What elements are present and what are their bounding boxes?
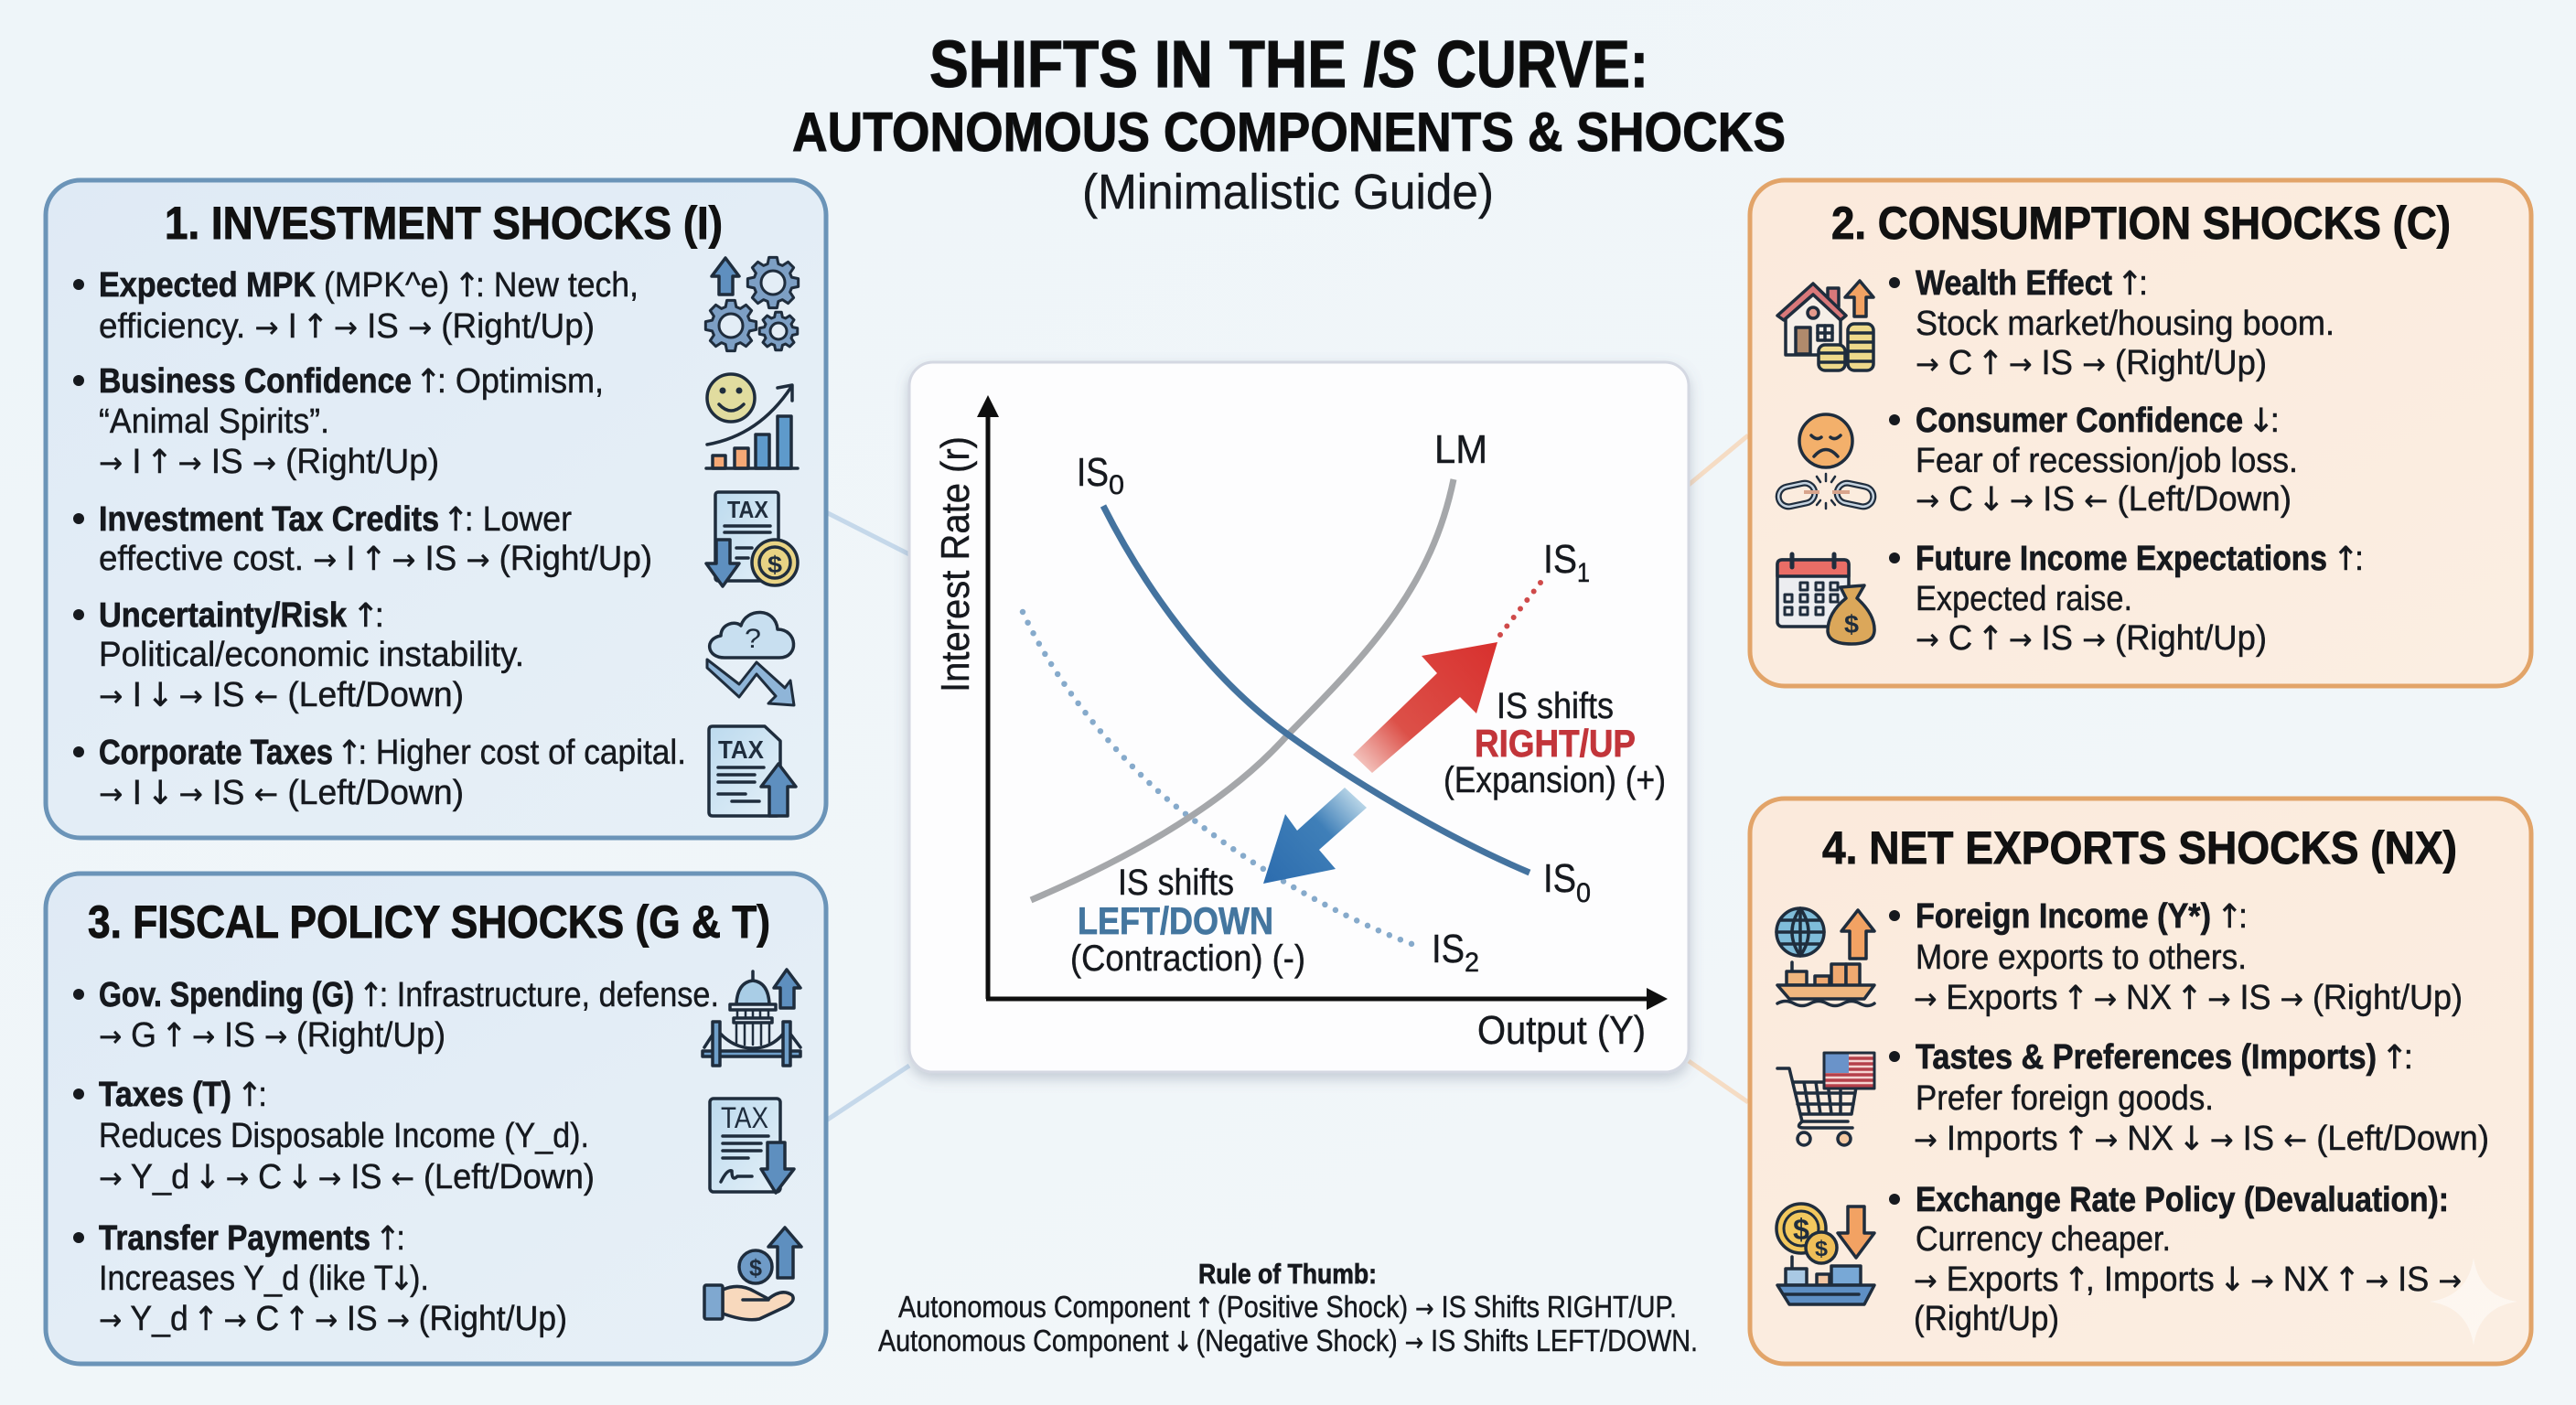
- item: business confidence: Business Confidence: [99, 362, 412, 401]
- item: consumer confidence: ↓:: [2248, 402, 2280, 440]
- arrow: red right/up shift: [1353, 642, 1497, 773]
- item: future income expectations: Expected raise.: [1916, 580, 2132, 618]
- item: expected MPK: efficiency. → I ↑ → IS → (Right/Up): [99, 307, 595, 346]
- rule of thumb: Autonomous Component ↓ (Negative Shock) → IS Shifts LEFT/DOWN.: [878, 1324, 1698, 1358]
- icon: corporate tax document: TAX: [718, 735, 764, 764]
- callout: expansion: RIGHT/UP: [1475, 722, 1636, 765]
- item: taxes: Taxes (T): [99, 1076, 231, 1114]
- item: foreign income: → Exports ↑ → NX ↑ → IS → (Right/Up): [1914, 979, 2463, 1017]
- icon: capitol and bridge: [703, 970, 800, 1066]
- item: transfer payments: Transfer Payments: [99, 1219, 370, 1258]
- icon: uncertainty cloud with falling arrow: [707, 612, 794, 705]
- callout: contraction: (Contraction) (-): [1070, 938, 1305, 979]
- item: expected MPK: [73, 266, 639, 346]
- icon: house with coins: [1777, 281, 1873, 370]
- icon: coins and blue ship: $: [1793, 1213, 1809, 1246]
- item: uncertainty: → I ↓ → IS ← (Left/Down): [99, 676, 464, 714]
- item: exchange rate policy: → Exports ↑, Imports ↓ → NX ↑ → IS →: [1914, 1260, 2462, 1299]
- callout: expansion: [1444, 686, 1666, 800]
- item: consumer confidence: Fear of recession/job loss.: [1916, 442, 2298, 480]
- item: foreign income: Foreign Income (Y*): [1916, 897, 2211, 936]
- item: investment tax credits: [73, 500, 652, 578]
- item: transfer payments: → Y_d ↑ → C ↑ → IS → (Right/Up): [99, 1300, 567, 1338]
- rule of thumb: [878, 1258, 1698, 1358]
- label: IS0 bottom: [1543, 856, 1591, 908]
- icon: tax document with down arrow: [710, 1099, 794, 1193]
- y axis: [977, 395, 999, 999]
- icon: calendar and money bag: $: [1844, 610, 1859, 638]
- item: tastes and preferences: Tastes & Preferences (Imports): [1916, 1038, 2377, 1077]
- item: consumer confidence: → C ↓ → IS ← (Left/Down): [1916, 480, 2292, 519]
- icon: uncertainty cloud with falling arrow: ?: [745, 624, 761, 654]
- item: expected MPK: Expected MPK: [99, 266, 316, 305]
- label: IS0 bottom: IS: [1543, 856, 1576, 901]
- icon: tax credit document: $: [767, 551, 783, 578]
- label: IS0 top: IS: [1077, 450, 1109, 495]
- item: wealth effect: Wealth Effect: [1916, 264, 2112, 303]
- item: tastes and preferences: → Imports ↑ → NX ↓ → IS ← (Left/Down): [1914, 1120, 2489, 1158]
- item: wealth effect: [1889, 264, 2334, 382]
- title: IS: [1363, 28, 1416, 102]
- item: expected MPK: (MPK^e) ↑: New tech,: [324, 266, 639, 305]
- item: exchange rate policy: (Right/Up): [1914, 1300, 2059, 1338]
- icon: tax credit document: [706, 492, 798, 586]
- callout: contraction: [1070, 863, 1305, 979]
- item: wealth effect: Stock market/housing boom.: [1916, 305, 2334, 343]
- label: IS0 top: 0: [1109, 470, 1124, 500]
- item: business confidence: ↑: Optimism,: [415, 362, 604, 401]
- item: uncertainty: Uncertainty/Risk: [99, 596, 348, 635]
- item: future income expectations: Future Income Expectations: [1916, 540, 2327, 578]
- rule of thumb: Autonomous Component ↑ (Positive Shock) → IS Shifts RIGHT/UP.: [898, 1290, 1677, 1325]
- icon: tax credit document: TAX: [727, 496, 769, 523]
- item: tastes and preferences: Prefer foreign goods.: [1916, 1079, 2214, 1118]
- label: IS1: IS: [1543, 537, 1577, 582]
- item: business confidence: “Animal Spirits”.: [99, 402, 329, 441]
- item: foreign income: More exports to others.: [1916, 938, 2247, 977]
- item: consumer confidence: [1889, 402, 2298, 519]
- item: future income expectations: ↑:: [2333, 540, 2364, 578]
- heading: net exports shocks: 4. NET EXPORTS SHOCKS (NX): [1822, 822, 2457, 874]
- item: consumer confidence: Consumer Confidence: [1916, 402, 2243, 440]
- item: gov spending: ↑: Infrastructure, defense.: [359, 976, 719, 1014]
- label: IS0 bottom: 0: [1576, 878, 1591, 908]
- item: corporate taxes: Corporate Taxes: [99, 734, 333, 772]
- item: uncertainty: ↑:: [352, 596, 384, 635]
- x axis: [986, 988, 1668, 1010]
- item: taxes: Reduces Disposable Income (Y_d).: [99, 1117, 589, 1155]
- panel: 2. consumption shocks: [1750, 180, 2531, 686]
- item: taxes: ↑:: [237, 1076, 267, 1114]
- item: transfer payments: [73, 1219, 567, 1338]
- icon: shopping cart with flag: [1777, 1053, 1874, 1145]
- heading: investment shocks: 1. INVESTMENT SHOCKS (I): [165, 198, 723, 249]
- icon: coins and blue ship: $: [1815, 1237, 1829, 1261]
- item: investment tax credits: effective cost. → I ↑ → IS → (Right/Up): [99, 540, 652, 578]
- title: AUTONOMOUS COMPONENTS & SHOCKS: [792, 102, 1786, 163]
- curve: IS0: [1103, 506, 1530, 873]
- callout: contraction: IS shifts: [1118, 863, 1234, 903]
- panel: 4. net exports shocks: [1750, 799, 2531, 1364]
- panel: IS-LM chart: [909, 362, 1689, 1072]
- icon: corporate tax document: [709, 726, 796, 816]
- icon: tax document with down arrow: TAX: [721, 1101, 768, 1134]
- title: (Minimalistic Guide): [1082, 165, 1494, 220]
- item: business confidence: [73, 362, 604, 481]
- label: IS2: IS: [1432, 927, 1465, 971]
- item: exchange rate policy: Currency cheaper.: [1916, 1220, 2171, 1259]
- panel: 3. fiscal policy shocks: [46, 874, 826, 1364]
- item: investment tax credits: Investment Tax Credits: [99, 500, 439, 539]
- icon: calendar and money bag: [1777, 554, 1874, 644]
- item: corporate taxes: [73, 734, 686, 812]
- title: [792, 28, 1786, 220]
- curve: IS1 dotted: [1500, 583, 1540, 635]
- item: investment tax credits: ↑: Lower: [443, 500, 572, 539]
- callout: expansion: IS shifts: [1497, 686, 1614, 726]
- title: CURVE:: [1436, 28, 1648, 102]
- axis label: interest rate: Interest Rate (r): [933, 436, 978, 692]
- item: gov spending: [73, 976, 719, 1055]
- curve: LM: [1031, 479, 1454, 900]
- icon: sad face and broken chain: [1776, 414, 1875, 509]
- item: taxes: → Y_d ↓ → C ↓ → IS ← (Left/Down): [99, 1158, 595, 1196]
- label: IS2: [1432, 927, 1479, 978]
- label: IS2: 2: [1465, 948, 1479, 978]
- curve: IS2 dotted: [1023, 612, 1414, 945]
- label: LM: LM: [1434, 427, 1487, 472]
- item: tastes and preferences: [1889, 1038, 2489, 1158]
- heading: fiscal policy shocks: 3. FISCAL POLICY SHOCKS (G & T): [88, 896, 770, 948]
- arrow: blue left/down shift: [1263, 788, 1367, 884]
- icon: sparkle watermark: [2430, 1258, 2517, 1346]
- item: future income expectations: [1889, 540, 2364, 658]
- icon: globe and cargo ship: [1776, 908, 1874, 1006]
- heading: consumption shocks: 2. CONSUMPTION SHOCKS (C): [1831, 198, 2451, 249]
- icon: hand with coin: [704, 1228, 801, 1320]
- item: corporate taxes: ↑: Higher cost of capital.: [337, 734, 686, 772]
- item: tastes and preferences: ↑:: [2381, 1038, 2413, 1077]
- item: exchange rate policy: [1889, 1181, 2462, 1338]
- item: foreign income: [1889, 897, 2463, 1017]
- icon: hand with coin: $: [749, 1254, 763, 1282]
- item: corporate taxes: → I ↓ → IS ← (Left/Down): [99, 774, 464, 812]
- callout: contraction: LEFT/DOWN: [1078, 899, 1273, 942]
- item: uncertainty: Political/economic instability.: [99, 636, 524, 674]
- item: future income expectations: → C ↑ → IS → (Right/Up): [1916, 619, 2267, 658]
- rule of thumb: Rule of Thumb:: [1198, 1258, 1377, 1290]
- item: transfer payments: Increases Y_d (like T↓).: [99, 1260, 429, 1298]
- item: transfer payments: ↑:: [375, 1219, 405, 1258]
- item: wealth effect: → C ↑ → IS → (Right/Up): [1916, 344, 2267, 382]
- item: exchange rate policy: Exchange Rate Policy (Devaluation):: [1916, 1181, 2449, 1219]
- item: taxes: [73, 1076, 595, 1196]
- icon: gears with up arrow: [705, 257, 799, 351]
- icon: smiley and growth chart: [706, 374, 798, 468]
- item: uncertainty: [73, 596, 524, 714]
- item: wealth effect: ↑:: [2117, 264, 2148, 303]
- label: IS1: 1: [1577, 558, 1590, 588]
- title: SHIFTS IN THE: [929, 28, 1347, 102]
- callout: expansion: (Expansion) (+): [1444, 760, 1666, 800]
- axis label: output: Output (Y): [1477, 1008, 1646, 1053]
- item: business confidence: → I ↑ → IS → (Right/Up): [99, 443, 439, 481]
- item: gov spending: Gov. Spending (G): [99, 976, 354, 1014]
- item: foreign income: ↑:: [2216, 897, 2248, 936]
- item: gov spending: → G ↑ → IS → (Right/Up): [99, 1016, 445, 1055]
- icon: coins and blue ship: [1776, 1204, 1874, 1304]
- panel: 1. investment shocks: [46, 180, 826, 838]
